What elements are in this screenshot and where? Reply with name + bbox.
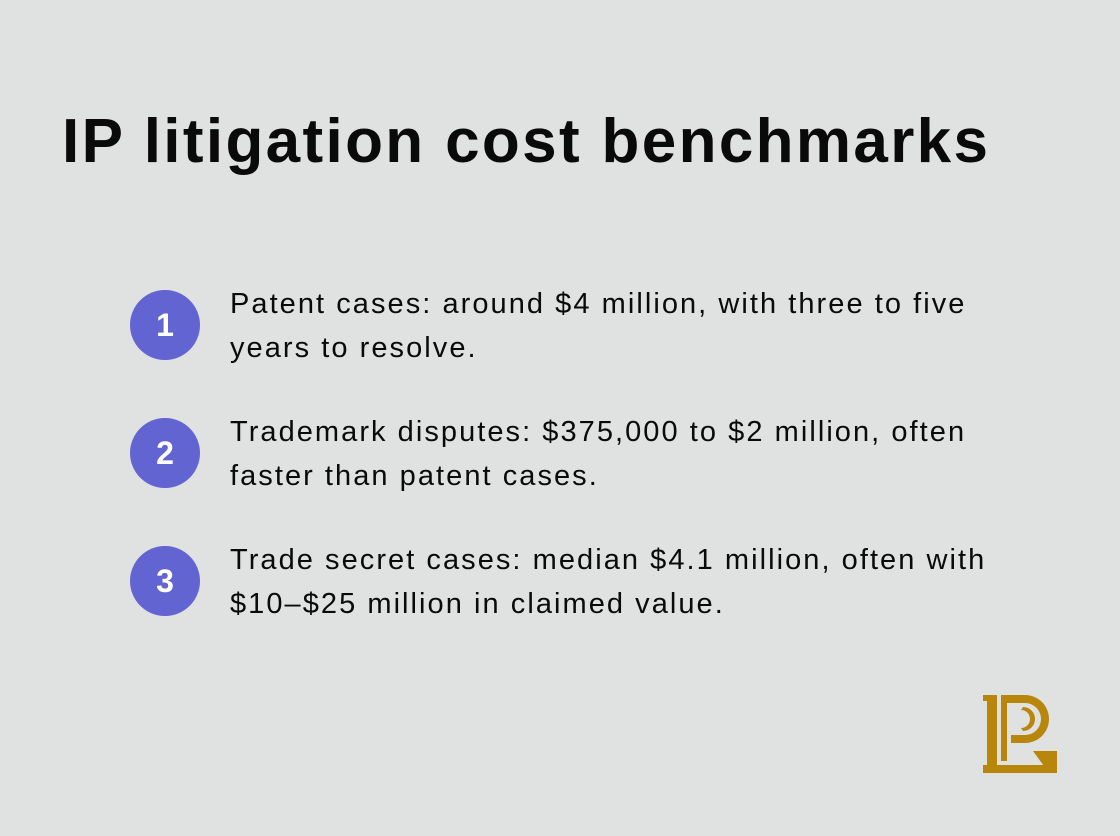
badge 1 [130,290,200,360]
text 1: years to resolve. [230,332,478,364]
text 2: Trademark disputes: $375,000 to $2 million, often [230,416,966,448]
badge 3 [130,546,200,616]
badge 2 [130,418,200,488]
text 2 [230,416,966,492]
title: IP litigation cost benchmarks [62,107,990,176]
text 2: faster than patent cases. [230,460,599,492]
item 1 [130,288,966,364]
text 1: Patent cases: around $4 million, with three to five [230,288,966,320]
badge 3: 3 [156,563,174,599]
item 2 [130,416,966,492]
badge 2: 2 [156,435,174,471]
text 3: $10–$25 million in claimed value. [230,588,725,620]
text 3: Trade secret cases: median $4.1 million, often with [230,544,986,576]
item 3 [130,544,986,620]
icon: logo [983,695,1057,773]
text 1 [230,288,966,364]
text 3 [230,544,986,620]
badge 1: 1 [156,307,174,343]
